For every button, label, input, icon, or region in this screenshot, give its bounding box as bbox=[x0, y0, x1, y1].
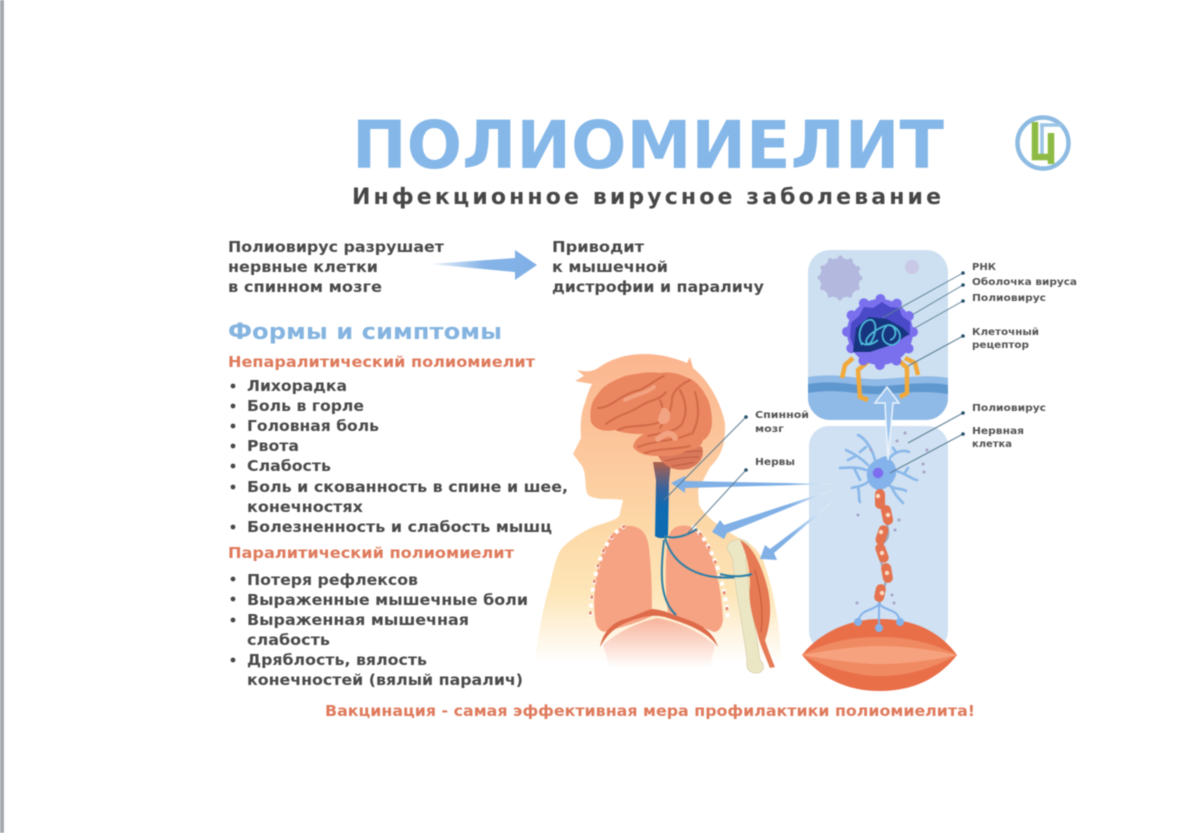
callout: vaccination: Вакцинация - самая эффективная мера профилактики полиомиелита! bbox=[325, 702, 975, 720]
muscle bbox=[740, 540, 775, 668]
text block: cause bbox=[228, 238, 444, 296]
list: paralytic symptoms: Выраженная мышечная bbox=[247, 611, 469, 629]
label: receptor: Клеточный bbox=[972, 327, 1039, 338]
subtitle: Инфекционное вирусное заболевание bbox=[352, 185, 941, 210]
cell body bbox=[867, 456, 896, 490]
text block: effect: к мышечной bbox=[552, 258, 668, 276]
list: paralytic symptoms: Дряблость, вялость bbox=[247, 651, 427, 669]
list: non-paralytic symptoms: Рвота bbox=[247, 437, 299, 455]
text block: cause: нервные клетки bbox=[228, 258, 378, 276]
icon: logo bbox=[1018, 118, 1068, 168]
label: RNA: РНК bbox=[972, 262, 997, 273]
spinal cord bbox=[655, 482, 669, 538]
label: nerve cell: Нервная bbox=[972, 426, 1024, 437]
nerves bbox=[662, 529, 752, 615]
bone bbox=[727, 540, 763, 673]
heading: non-paralytic: Непаралитический полиомиелит bbox=[228, 353, 535, 371]
body silhouette bbox=[533, 354, 783, 672]
label: nerve cell: клетка bbox=[972, 439, 1012, 450]
arrow: cause to effect bbox=[430, 250, 537, 280]
list: non-paralytic symptoms bbox=[231, 377, 568, 536]
list: non-paralytic symptoms: Головная боль bbox=[247, 417, 379, 435]
label: nerves: Нервы bbox=[755, 457, 795, 468]
label: spinal cord bbox=[755, 410, 809, 435]
heading: paralytic: Паралитический полиомиелит bbox=[228, 544, 514, 562]
RNA bbox=[860, 320, 900, 345]
nerve terminals bbox=[854, 602, 904, 632]
illustration: child body bbox=[533, 354, 783, 673]
arrows: neuron to body bbox=[671, 476, 835, 560]
muscle bbox=[802, 619, 957, 691]
list: non-paralytic symptoms: конечностях bbox=[247, 498, 363, 516]
text block: effect: Приводит bbox=[552, 238, 644, 256]
list: non-paralytic symptoms: Болезненность и слабость мышц bbox=[247, 518, 552, 536]
text block: effect bbox=[552, 238, 764, 296]
receptors bbox=[842, 355, 918, 400]
list: paralytic symptoms: Потеря рефлексов bbox=[247, 571, 418, 589]
panel: virus at receptor bbox=[808, 250, 948, 420]
virus particles bbox=[856, 432, 928, 604]
list: paralytic symptoms: слабость bbox=[247, 631, 330, 649]
membrane bbox=[808, 375, 948, 420]
heading: forms and symptoms: Формы и симптомы bbox=[228, 320, 502, 345]
label: spinal cord: Спинной bbox=[755, 410, 809, 421]
panel: neuron bbox=[809, 426, 948, 651]
brain bbox=[590, 372, 712, 456]
axon bbox=[879, 490, 888, 605]
page edge stripe bbox=[0, 0, 4, 833]
title: ПОЛИОМИЕЛИТ bbox=[352, 107, 944, 184]
label: receptor: рецептор bbox=[972, 340, 1029, 351]
brain stem bbox=[653, 462, 671, 490]
list: paralytic symptoms bbox=[231, 571, 528, 689]
diaphragm bbox=[600, 609, 718, 647]
cerebellum bbox=[656, 445, 703, 470]
text block: cause: в спинном мозге bbox=[228, 278, 382, 296]
list: paralytic symptoms: Выраженные мышечные боли bbox=[247, 591, 528, 609]
list: paralytic symptoms: конечностей (вялый паралич) bbox=[247, 671, 523, 689]
list: non-paralytic symptoms: Боль и скованность в спине и шее, bbox=[247, 478, 568, 496]
faint virus bbox=[820, 258, 860, 298]
label: nerve cell bbox=[972, 426, 1024, 450]
label: receptor bbox=[972, 327, 1039, 351]
muscle nerve junction bbox=[720, 574, 752, 576]
label: poliovirus 2: Полиовирус bbox=[972, 403, 1046, 414]
text block: cause: Полиовирус разрушает bbox=[228, 238, 444, 256]
label: poliovirus: Полиовирус bbox=[972, 293, 1046, 304]
list: non-paralytic symptoms: Слабость bbox=[247, 457, 331, 475]
leaders bbox=[664, 273, 963, 535]
text block: effect: дистрофии и параличу bbox=[552, 278, 764, 296]
lung left bbox=[594, 526, 652, 632]
list: non-paralytic symptoms: Лихорадка bbox=[247, 377, 347, 395]
poliovirus bbox=[847, 299, 913, 365]
belly bbox=[603, 618, 715, 668]
label: envelope: Оболочка вируса bbox=[972, 276, 1077, 288]
rib cage dots bbox=[590, 526, 625, 620]
list: non-paralytic symptoms: Боль в горле bbox=[247, 397, 364, 415]
label: spinal cord: мозг bbox=[755, 424, 784, 435]
arrow: neuron to virus panel bbox=[875, 387, 899, 460]
dendrites bbox=[840, 435, 917, 503]
lung right bbox=[666, 525, 723, 632]
